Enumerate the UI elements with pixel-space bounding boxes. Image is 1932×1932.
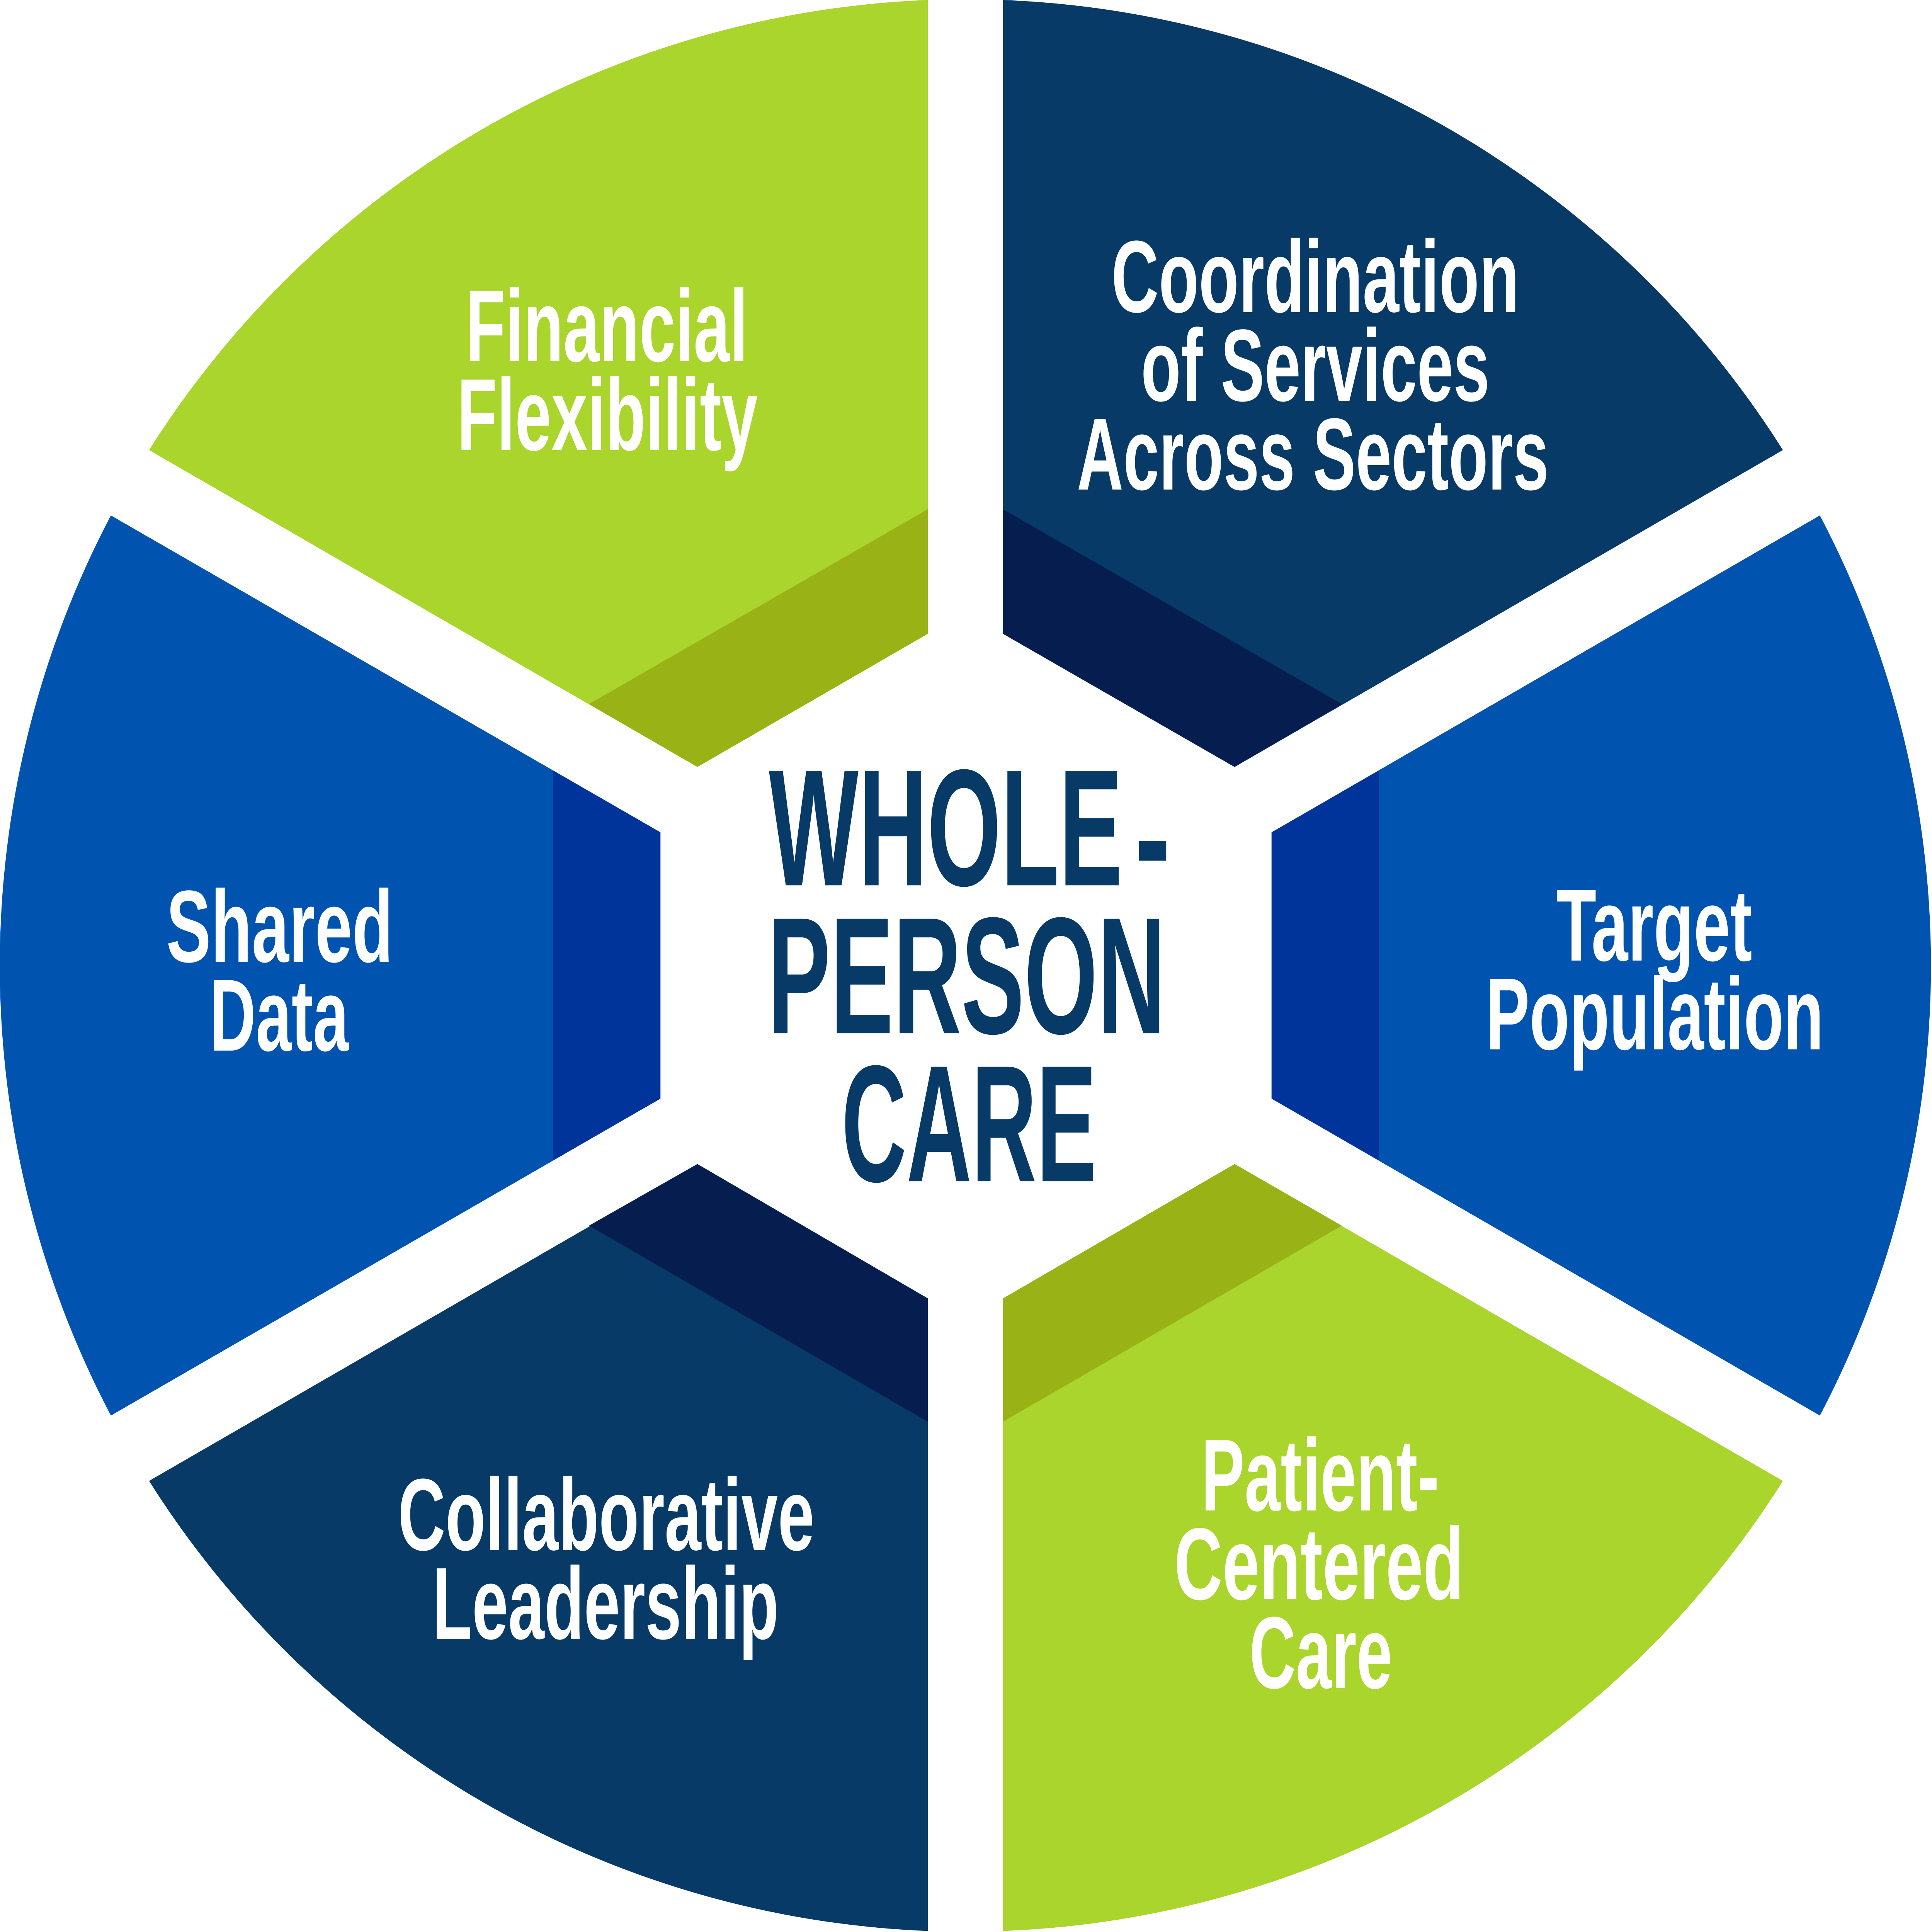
segment shaded inner edge <box>553 770 660 1160</box>
segment body <box>149 1164 928 1931</box>
center title: whole-person care <box>768 735 1170 1217</box>
segment shaded inner edge <box>1003 509 1342 767</box>
label: patient-centered care: Patient- <box>1201 1418 1439 1532</box>
label: target population <box>1486 868 1823 1072</box>
panel: collaborative leadership <box>149 1164 928 1931</box>
label: coordination of services across sectors: Across Sectors <box>1077 397 1549 512</box>
label: financial flexibility: Financial <box>466 269 748 383</box>
label: target population: Target <box>1556 868 1752 983</box>
label: patient-centered care: Centered <box>1174 1507 1464 1621</box>
label: collaborative leadership: Leadership <box>432 1546 779 1661</box>
center title: whole-person care: CARE <box>842 1031 1097 1217</box>
segment shaded inner edge <box>589 1164 928 1422</box>
segment body <box>0 515 660 1415</box>
center title: whole-person care: PERSON <box>768 883 1166 1069</box>
segment body <box>1003 0 1783 767</box>
label: collaborative leadership: Collaborative <box>398 1458 815 1572</box>
panel: target population <box>1272 515 1931 1415</box>
panel: financial flexibility <box>149 0 928 767</box>
segment shaded inner edge <box>1003 1164 1342 1422</box>
label: financial flexibility <box>457 269 758 473</box>
center title: whole-person care: - <box>1135 743 1170 930</box>
label: coordination of services across sectors: Coordination <box>1111 219 1519 334</box>
segment body <box>1003 1164 1783 1931</box>
label: coordination of services across sectors <box>1077 219 1549 512</box>
label: shared data: Shared <box>166 869 393 984</box>
panel: shared data <box>0 515 660 1415</box>
label: patient-centered care: Care <box>1249 1596 1392 1710</box>
center title: whole-person care: WHOLE <box>769 735 1122 921</box>
label: patient-centered care <box>1174 1418 1464 1710</box>
panel: patient-centered care <box>1003 1164 1783 1931</box>
segment shaded inner edge <box>1272 770 1379 1160</box>
label: shared data: Data <box>209 958 349 1073</box>
panel: coordination of services across sectors <box>1003 0 1783 767</box>
label: collaborative leadership <box>398 1458 815 1661</box>
label: coordination of services across sectors: of Services <box>1141 308 1490 423</box>
segment body <box>149 0 928 767</box>
label: shared data <box>166 869 393 1073</box>
label: financial flexibility: Flexibility <box>457 358 758 473</box>
segment shaded inner edge <box>589 509 928 767</box>
segment body <box>1272 515 1931 1415</box>
